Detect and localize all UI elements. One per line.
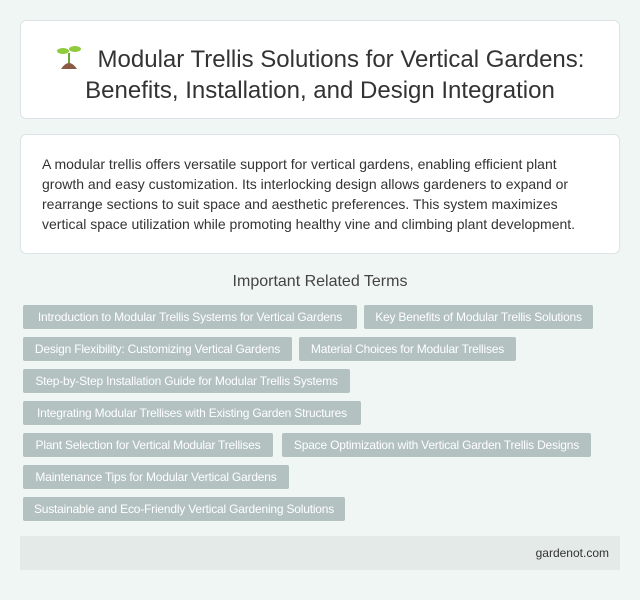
footer credit: gardenot.com (536, 546, 609, 560)
tag: Introduction to Modular Trellis Systems for Vertical Gardens (38, 310, 342, 324)
tags (23, 305, 593, 521)
heading: related terms: Important Related Terms (233, 273, 407, 290)
tag (23, 401, 361, 425)
title: Modular Trellis Solutions for Vertical Gardens: Benefits, Installation, and Design Integration (85, 46, 584, 104)
footer (20, 536, 620, 570)
tag: Design Flexibility: Customizing Vertical Gardens (35, 342, 280, 356)
tag: Key Benefits of Modular Trellis Solutions (375, 310, 582, 324)
description text: A modular trellis offers versatile support for vertical gardens, enabling efficient plant growth and easy customization. Its interlocking design allows gardeners to expand or rearrange sections to suit space and aesthetic preferences. This system maximizes vertical space utilization while promoting healthy vine and climbing plant development. (42, 156, 575, 232)
tag (23, 433, 273, 457)
tag: Integrating Modular Trellises with Existing Garden Structures (37, 406, 347, 420)
tag: Space Optimization with Vertical Garden Trellis Designs (294, 438, 579, 452)
tag (282, 433, 591, 457)
tag (23, 465, 289, 489)
tag (23, 497, 345, 521)
title card (20, 20, 620, 119)
tag (23, 337, 292, 361)
tag: Step-by-Step Installation Guide for Modular Trellis Systems (35, 374, 338, 388)
description card (20, 134, 620, 254)
tag (299, 337, 516, 361)
tag (23, 305, 357, 329)
tag: Maintenance Tips for Modular Vertical Gardens (35, 470, 277, 484)
tag: Plant Selection for Vertical Modular Trellises (36, 438, 260, 452)
tag (364, 305, 593, 329)
tag: Sustainable and Eco-Friendly Vertical Gardening Solutions (34, 502, 334, 516)
tag: Material Choices for Modular Trellises (311, 342, 504, 356)
tag (23, 369, 350, 393)
icon: seedling (57, 46, 81, 69)
